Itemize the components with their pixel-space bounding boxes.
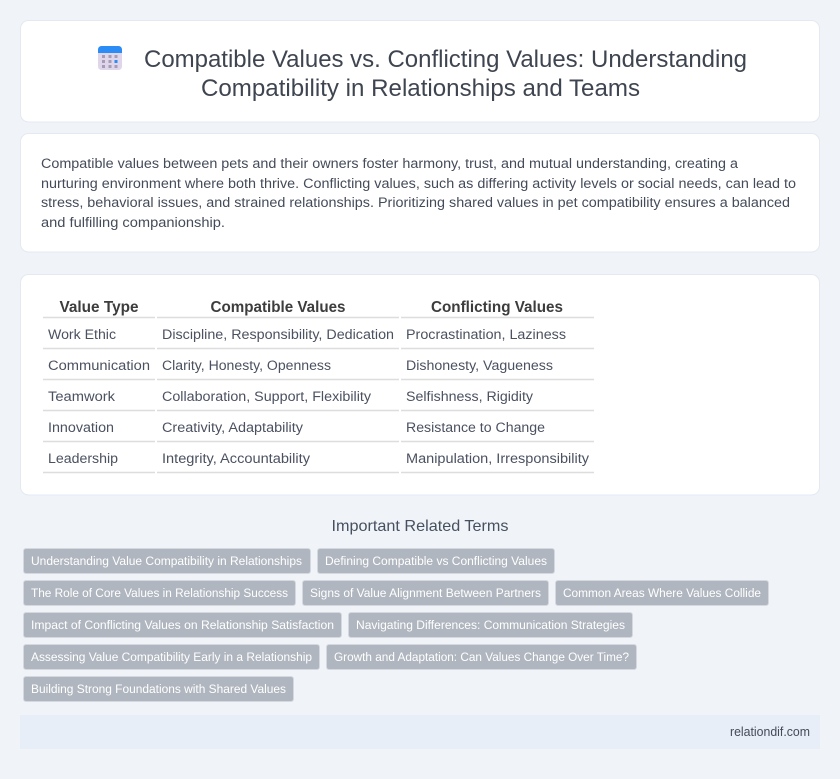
row: communication: [48, 358, 553, 374]
tag: [24, 580, 296, 606]
row: work ethic: Work Ethic: [48, 327, 116, 343]
icon: calendar: [98, 46, 122, 70]
row: teamwork: Selfishness, Rigidity: [406, 389, 534, 405]
row: communication: Dishonesty, Vagueness: [406, 358, 553, 374]
row: work ethic: Discipline, Responsibility, Dedication: [162, 327, 394, 343]
table header: Compatible Values: [210, 299, 346, 316]
footer: [20, 715, 820, 749]
tag: [24, 676, 294, 702]
intro paragraph: [41, 156, 796, 231]
row: teamwork: Teamwork: [48, 389, 116, 405]
tag: Navigating Differences: Communication Strategies: [356, 618, 625, 632]
panel: comparison table: [20, 274, 820, 495]
tag: Assessing Value Compatibility Early in a Relationship: [31, 650, 312, 664]
row: innovation: Resistance to Change: [406, 420, 545, 436]
tag: Signs of Value Alignment Between Partners: [310, 586, 541, 600]
panel: intro text: [20, 134, 820, 252]
row: work ethic: Procrastination, Laziness: [406, 327, 566, 343]
tag: [318, 548, 554, 574]
tag: [24, 612, 342, 638]
title: Compatibility in Relationships and Teams: [201, 75, 640, 102]
panel: header: [20, 20, 820, 122]
table header: Conflicting Values: [431, 299, 563, 316]
heading: related terms: Important Related Terms: [332, 518, 508, 535]
tag: Understanding Value Compatibility in Relationships: [31, 554, 302, 568]
tag: Common Areas Where Values Collide: [563, 586, 761, 600]
row: leadership: Manipulation, Irresponsibility: [406, 451, 590, 467]
intro paragraph: and fulfilling companionship.: [41, 215, 225, 231]
row: communication: Clarity, Honesty, Openness: [162, 358, 331, 374]
row: teamwork: Collaboration, Support, Flexibility: [162, 389, 372, 405]
tag: [326, 644, 636, 670]
tag: [556, 580, 768, 606]
row: work ethic: [48, 327, 566, 343]
intro paragraph: nurturing environment where both thrive. Conflicting values, such as differing activity levels or social needs, can lead to: [41, 176, 796, 192]
tag: [24, 644, 320, 670]
tag: [24, 548, 310, 574]
tag: Impact of Conflicting Values on Relationship Satisfaction: [31, 618, 334, 632]
row: innovation: Creativity, Adaptability: [162, 420, 304, 436]
title: Compatible Values vs. Conflicting Values: Understanding: [144, 46, 747, 73]
row: leadership: [48, 451, 590, 467]
footer source: relationdif.com: [730, 725, 810, 739]
row: innovation: Innovation: [48, 420, 114, 436]
row: teamwork: [48, 389, 534, 405]
table header: [60, 299, 563, 316]
title: [144, 46, 747, 102]
row: leadership: Integrity, Accountability: [162, 451, 311, 467]
tag: [348, 612, 632, 638]
tag: Growth and Adaptation: Can Values Change Over Time?: [334, 650, 629, 664]
table header: Value Type: [60, 299, 139, 316]
row: communication: Communication: [48, 358, 150, 374]
tag: Defining Compatible vs Conflicting Values: [325, 554, 547, 568]
row: leadership: Leadership: [48, 451, 118, 467]
tag: The Role of Core Values in Relationship Success: [31, 586, 288, 600]
intro paragraph: stress, behavioral issues, and strained relationships. Prioritizing shared values in pet compatibility ensures a balanced: [41, 195, 790, 211]
panel: related term tags: [24, 548, 768, 702]
tag: Building Strong Foundations with Shared Values: [31, 682, 286, 696]
row: innovation: [48, 420, 545, 436]
tag: [302, 580, 548, 606]
intro paragraph: Compatible values between pets and their owners foster harmony, trust, and mutual understanding, creating a: [41, 156, 738, 172]
